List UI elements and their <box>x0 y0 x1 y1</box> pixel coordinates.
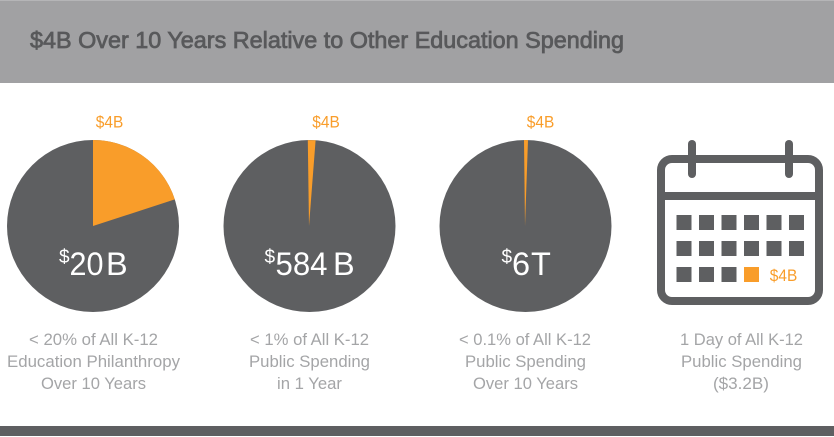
panel: 6T pie <box>440 114 612 393</box>
icon: calendar <box>661 140 819 301</box>
pie value: 6 <box>512 246 530 282</box>
header band <box>0 0 834 83</box>
caption <box>459 330 591 393</box>
pie value: 20 <box>70 246 104 282</box>
pie value <box>59 246 128 282</box>
caption: ($3.2B) <box>713 374 769 393</box>
pie value: T <box>531 246 551 282</box>
caption: Public Spending <box>681 352 802 371</box>
pie value: $ <box>502 247 512 268</box>
pie chart: 0.1 percent <box>440 140 612 312</box>
caption: Over 10 Years <box>41 374 146 393</box>
label: 4B slice: $4B <box>312 114 340 132</box>
label: 4B slice: $4B <box>527 114 554 132</box>
pie chart: 1 percent <box>224 140 396 312</box>
pie value: B <box>333 246 355 282</box>
pie value: $ <box>59 247 70 268</box>
caption: Public Spending <box>249 352 370 371</box>
panel: calendar <box>661 140 819 393</box>
pie value <box>264 246 355 282</box>
pie value: B <box>106 246 128 282</box>
panel: 584B pie <box>224 114 396 393</box>
caption: < 20% of All K-12 <box>29 330 158 349</box>
caption: Over 10 Years <box>473 374 578 393</box>
caption: Education Philanthropy <box>7 352 181 371</box>
caption <box>249 330 370 393</box>
caption <box>7 330 181 393</box>
caption: 1 Day of All K-12 <box>680 330 803 349</box>
pie value: $ <box>264 247 276 268</box>
title: $4B Over 10 Years Relative to Other Education Spending <box>30 27 624 53</box>
pie chart: 20 percent <box>7 140 179 312</box>
footer bar <box>0 426 834 436</box>
caption <box>680 330 803 393</box>
panel: 20B pie <box>7 114 181 393</box>
caption: < 0.1% of All K-12 <box>459 330 591 349</box>
calendar label: $4B <box>770 267 797 285</box>
pie value: 584 <box>276 246 328 282</box>
pie value <box>502 246 551 282</box>
caption: Public Spending <box>465 352 586 371</box>
label: 4B slice: $4B <box>96 114 123 132</box>
caption: in 1 Year <box>277 374 342 393</box>
caption: < 1% of All K-12 <box>250 330 369 349</box>
